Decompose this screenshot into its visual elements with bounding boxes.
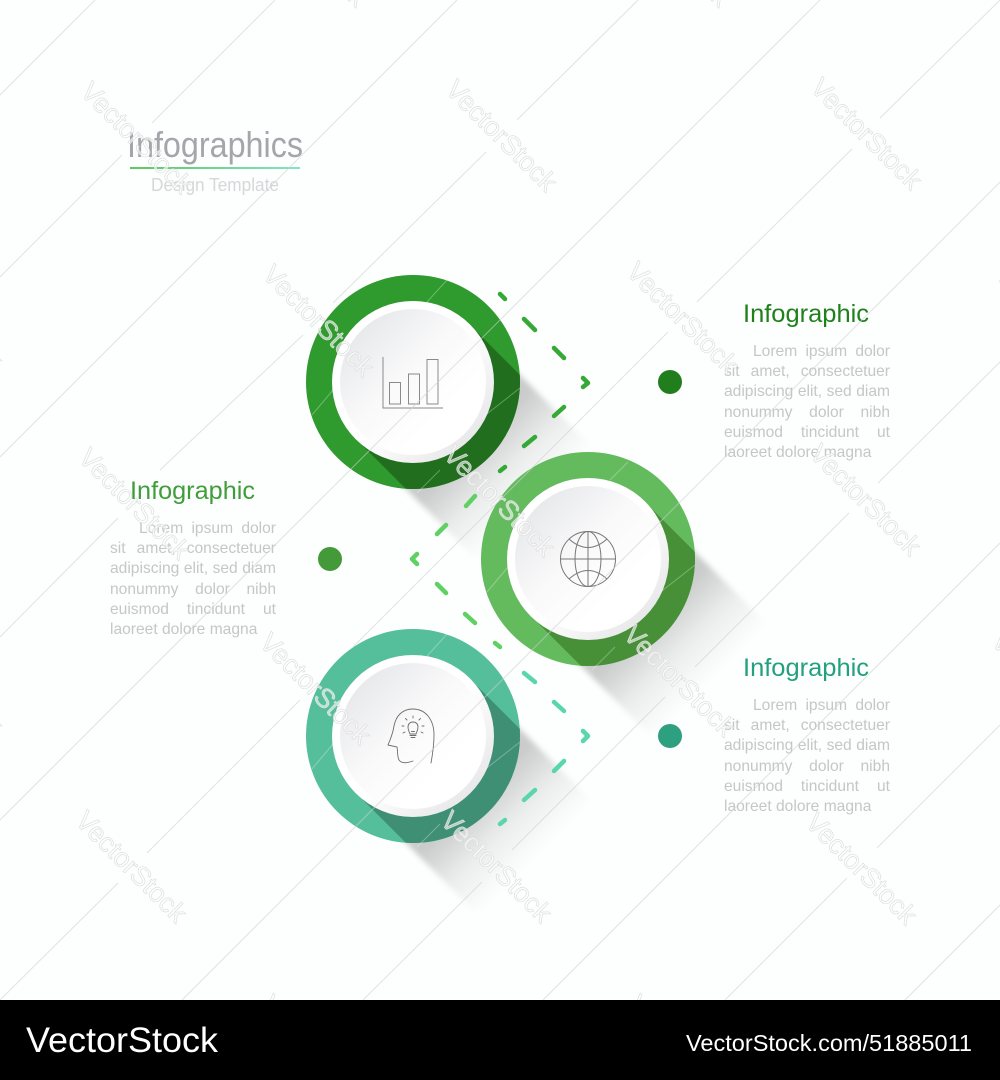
- watermark text: VectorStock: [440, 74, 563, 198]
- text block: step 3: sit amet, consectetuer: [724, 717, 890, 734]
- text block: step 1: euismod tincidunt ut: [724, 424, 890, 441]
- long shadow: [356, 679, 620, 943]
- watermark text: VectorStock: [805, 72, 928, 196]
- icon: head with light bulb: [388, 709, 434, 763]
- icon: bar chart: [383, 357, 443, 408]
- text block: step 2: adipiscing elit, sed diam: [110, 560, 276, 577]
- text block: step 2: laoreet dolore magna: [110, 621, 257, 638]
- text block: step 1: [724, 343, 890, 461]
- watermark text: VectorStock: [73, 442, 196, 566]
- step 2 circle: light green: [481, 452, 748, 720]
- text block: step 1: laoreet dolore magna: [724, 444, 871, 461]
- watermark text: VectorStock: [75, 76, 198, 200]
- title: Infographics: Infographics: [127, 124, 303, 165]
- footer brand: VectorStock: [26, 1020, 218, 1060]
- text block: step 1: Lorem ipsum dolor: [753, 343, 890, 360]
- heading: step 2: Infographic: [130, 477, 255, 505]
- dot: step 3: [658, 724, 682, 748]
- text block: step 2: nonummy dolor nibh: [110, 581, 276, 598]
- watermark text: VectorStock: [800, 807, 923, 931]
- watermark text: VectorStock: [70, 805, 193, 929]
- title block: [127, 124, 303, 195]
- title underline: [130, 167, 300, 169]
- heading: step 1: Infographic: [743, 300, 869, 328]
- light green ring: [481, 452, 695, 666]
- watermark text: VectorStock: [254, 627, 377, 751]
- text block: step 3: adipiscing elit, sed diam: [724, 737, 890, 754]
- ring shadow: [360, 330, 520, 489]
- footer bar: [0, 1000, 1000, 1080]
- dashed arrow: step 3: [500, 673, 588, 824]
- dot: step 1: [658, 370, 682, 394]
- disc face: [515, 486, 661, 632]
- watermark text: VectorStock: [257, 259, 380, 383]
- text block: step 1: sit amet, consectetuer: [724, 363, 890, 380]
- text block: step 2: sit amet, consectetuer: [110, 540, 276, 557]
- long shadow: [356, 325, 620, 589]
- text block: step 1: adipiscing elit, sed diam: [724, 383, 890, 400]
- watermark text: VectorStock: [618, 619, 741, 743]
- footer image id: VectorStock.com/51885011: [686, 1030, 972, 1056]
- ring shadow: [360, 684, 520, 843]
- subtitle: Design Template: Design Template: [151, 175, 279, 195]
- disc face: [340, 663, 486, 809]
- icon: globe: [560, 532, 616, 586]
- dashed arrow: step 2: [412, 496, 500, 647]
- text block: step 2: Lorem ipsum dolor: [139, 520, 276, 537]
- watermark text: VectorStock: [804, 438, 927, 562]
- long shadow: [531, 502, 795, 766]
- white disc: [332, 301, 494, 463]
- text block: step 1: nonummy dolor nibh: [724, 404, 890, 421]
- watermark text: VectorStock: [438, 439, 561, 563]
- text block: step 2: [110, 520, 276, 638]
- text block: step 2: euismod tincidunt ut: [110, 601, 276, 618]
- watermark text: VectorStock: [435, 805, 558, 929]
- dashed arrow: step 1: [500, 294, 588, 471]
- white disc: [507, 478, 669, 640]
- dot: step 2: [318, 547, 342, 571]
- text block: step 3: Lorem ipsum dolor: [753, 697, 890, 714]
- disc face: [340, 309, 486, 455]
- heading: step 3: Infographic: [743, 654, 869, 682]
- step 3 circle: teal: [306, 629, 574, 897]
- watermark text: VectorStock: [621, 256, 744, 380]
- text block: step 3: euismod tincidunt ut: [724, 778, 890, 795]
- text block: step 3: nonummy dolor nibh: [724, 758, 890, 775]
- step 1 circle: dark green: [306, 275, 574, 543]
- teal ring: [306, 629, 520, 843]
- ring shadow: [536, 507, 695, 666]
- text block: step 3: [724, 697, 890, 815]
- white disc: [332, 655, 494, 817]
- dark green ring: [306, 275, 520, 489]
- text block: step 3: laoreet dolore magna: [724, 798, 871, 815]
